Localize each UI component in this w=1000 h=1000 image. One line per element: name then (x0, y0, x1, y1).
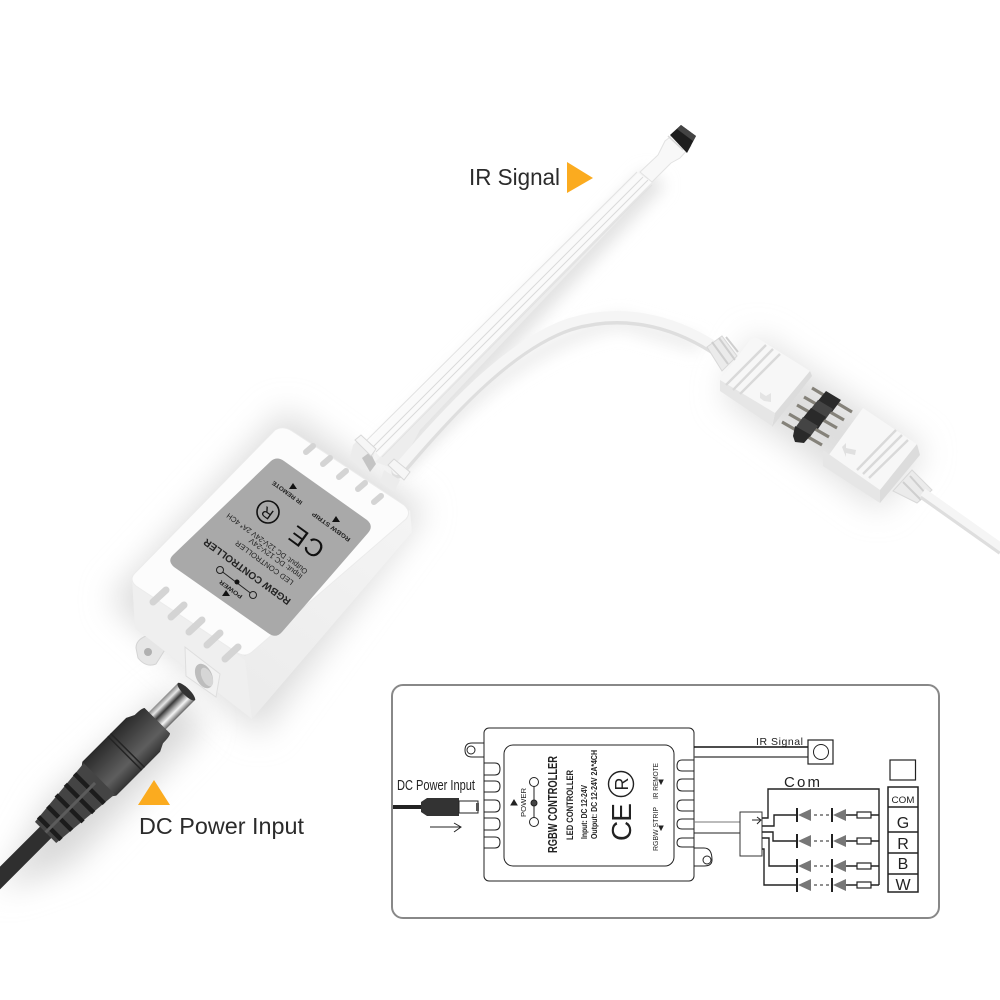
Com label: Com (784, 774, 820, 791)
DC power plug (0, 672, 206, 931)
pin table: COM (892, 795, 914, 805)
label text (201, 479, 352, 606)
diagram controller text: LED CONTROLLER (565, 770, 576, 840)
label: DC Power Input: DC Power Input (139, 813, 305, 839)
diagram controller text: RGBW CONTROLLER (545, 756, 560, 853)
gray product label (170, 458, 371, 636)
RGBW plug connector right (823, 408, 1000, 550)
wiring lines from controller (694, 822, 740, 833)
ventilation slots (153, 446, 381, 659)
connector pins (782, 388, 852, 445)
strain relief gland (707, 336, 737, 371)
DC socket (185, 647, 220, 697)
diagram DC plug: DC Power Input (397, 777, 476, 794)
label: IR Signal: IR Signal (469, 164, 560, 190)
diagram controller text (521, 750, 660, 853)
label symbols: CE (282, 518, 330, 564)
label text: Output: DC 12V-24V 2A* 4CH (225, 511, 309, 576)
power cable (0, 823, 55, 919)
diagram controller outline (465, 728, 712, 881)
label symbols (216, 483, 340, 598)
diagram controller text: Output: DC 12-24V 2A*4CH (590, 750, 599, 839)
IR receiver ribbon cable (366, 125, 696, 470)
diagram DC plug (393, 777, 479, 832)
label: DC Power Input (138, 780, 305, 839)
pin table: B (898, 856, 908, 873)
rubber collar (80, 704, 174, 798)
wiring diagram panel (392, 685, 939, 918)
IR signal sensor (694, 736, 833, 764)
controller box (132, 428, 412, 719)
LEDs and resistors (797, 808, 871, 892)
diagram controller text: Input: DC 12-24V (580, 784, 589, 839)
label text: IR REMOTE (271, 479, 304, 505)
pin table: G (897, 815, 909, 832)
diagram controller symbols: CE (606, 803, 637, 841)
diagram controller text: IR REMOTE (651, 763, 660, 799)
label text: Input: DC 12V-24V (247, 536, 304, 581)
metal barrel (146, 683, 195, 732)
diagram controller text: RGBW STRIP (651, 807, 660, 851)
pin table: W (895, 877, 911, 894)
orange arrow up (138, 780, 170, 805)
IR receiver head (640, 125, 696, 182)
box top face (132, 428, 409, 655)
pin table: R (897, 836, 909, 853)
label text: RGBW STRIP (311, 510, 352, 542)
strip circuit (740, 789, 879, 885)
RGBW round cable (397, 316, 714, 472)
cable clamps (350, 435, 410, 492)
diagram controller text: POWER (521, 788, 528, 817)
label text: LED CONTROLLER (233, 538, 295, 587)
RGBW plug connector left (707, 336, 812, 427)
diagram controller symbols (511, 772, 663, 841)
pin table (888, 760, 918, 894)
diagram controller symbols: R (612, 778, 632, 790)
label: IR Signal (469, 162, 593, 193)
label text: POWER (218, 578, 244, 599)
strain relief (30, 763, 115, 848)
orange arrow right (567, 162, 593, 193)
label text: RGBW CONTROLLER (201, 535, 293, 606)
IR signal sensor: IR Signal (756, 736, 803, 748)
soft background shadows (0, 170, 925, 890)
box front and side faces (132, 510, 412, 719)
mounting lug (136, 636, 166, 665)
label symbols: R (258, 502, 277, 522)
